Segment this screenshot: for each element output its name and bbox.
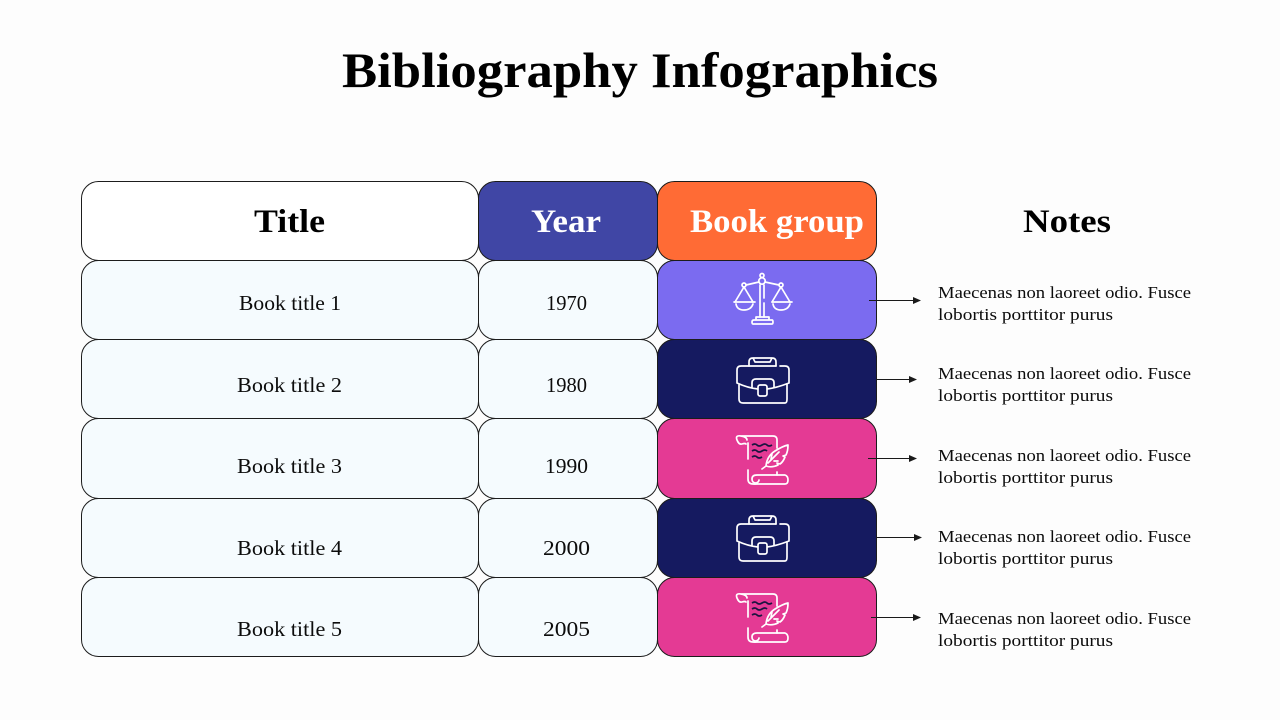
note: row 3: Maecenas non laoreet odio. Fusce: [938, 446, 1191, 465]
header: Year: [478, 182, 658, 260]
note: row 1: lobortis porttitor purus: [938, 305, 1113, 324]
header: Title: Title: [254, 204, 325, 240]
row 3 title cell: [82, 418, 478, 498]
icon: briefcase: [737, 516, 789, 561]
title: Bibliography Infographics: [342, 42, 938, 98]
note: row 4: lobortis porttitor purus: [938, 549, 1113, 568]
header: Book group: Book group: [690, 204, 864, 240]
note: row 2: [938, 364, 1191, 405]
icon: scroll and quill: [736, 594, 788, 642]
table: [82, 182, 876, 656]
row 3 year cell: [478, 418, 658, 498]
row 1 group cell: [658, 260, 876, 340]
row 4: [82, 498, 876, 578]
row 4 title cell: [82, 498, 478, 578]
row 5 group cell: [658, 578, 876, 656]
note: row 5: Maecenas non laoreet odio. Fusce: [938, 609, 1191, 628]
row 1 year cell: 1970: [546, 291, 587, 315]
note: row 5: [938, 609, 1191, 650]
row 5: [82, 578, 876, 656]
row 2 group cell: [658, 340, 876, 418]
row 2 year cell: 1980: [546, 373, 587, 397]
note: row 5: lobortis porttitor purus: [938, 631, 1113, 650]
header: Year: Year: [531, 204, 601, 240]
note: row 3: lobortis porttitor purus: [938, 468, 1113, 487]
row 1 year cell: [478, 260, 658, 340]
arrow: row 4: [877, 534, 922, 541]
row 1: [82, 260, 876, 340]
note: row 4: [938, 527, 1191, 568]
note: row 3: [938, 446, 1191, 487]
header: Book group: [658, 182, 876, 260]
note: row 4: Maecenas non laoreet odio. Fusce: [938, 527, 1191, 546]
row 5 title cell: [82, 578, 478, 656]
row 4 group cell: [658, 498, 876, 578]
row 4 year cell: 2000: [543, 536, 590, 560]
arrow: row 2: [877, 376, 917, 383]
row 2 year cell: [478, 340, 658, 418]
note: row 1: [938, 283, 1191, 324]
arrow: row 5: [871, 614, 921, 621]
heading: Notes: Notes: [1023, 204, 1111, 240]
icon: scales of justice: [734, 274, 792, 324]
header: Title: [82, 182, 478, 260]
row 5 year cell: 2005: [543, 617, 590, 641]
row 3 title cell: Book title 3: [237, 454, 342, 478]
icon: scroll and quill: [736, 436, 788, 484]
row 1 title cell: Book title 1: [239, 291, 341, 315]
row 5 title cell: Book title 5: [237, 617, 342, 641]
row 3: [82, 418, 876, 498]
row 5 year cell: [478, 578, 658, 656]
row 4 title cell: Book title 4: [237, 536, 343, 560]
arrow: row 1: [869, 297, 921, 304]
note: row 2: Maecenas non laoreet odio. Fusce: [938, 364, 1191, 383]
icon: briefcase: [737, 358, 789, 403]
row 2 title cell: [82, 340, 478, 418]
note: row 1: Maecenas non laoreet odio. Fusce: [938, 283, 1191, 302]
note: row 2: lobortis porttitor purus: [938, 386, 1113, 405]
row 2 title cell: Book title 2: [237, 373, 342, 397]
row 3 group cell: [658, 418, 876, 498]
row 4 year cell: [478, 498, 658, 578]
row 3 year cell: 1990: [545, 454, 588, 478]
row 2: [82, 340, 876, 418]
row 1 title cell: [82, 260, 478, 340]
arrow: row 3: [868, 455, 917, 462]
